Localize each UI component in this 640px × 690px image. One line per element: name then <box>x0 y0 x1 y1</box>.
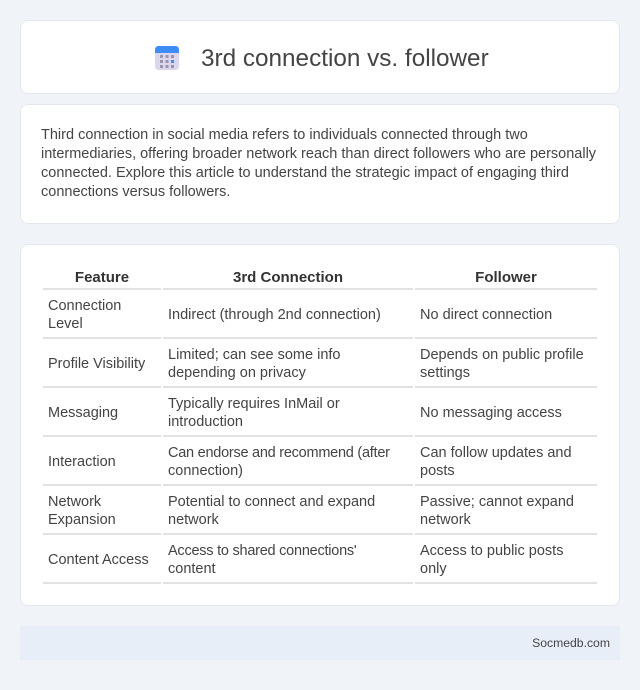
row: content access: Access to public posts <box>420 543 563 559</box>
row: content access <box>48 543 563 577</box>
row: network expansion: network <box>168 512 219 528</box>
row: profile visibility: Profile Visibility <box>48 356 145 372</box>
row: interaction: connection) <box>168 463 243 479</box>
table header: 3rd Connection <box>233 269 343 286</box>
intro text <box>41 127 596 200</box>
row: messaging <box>48 396 562 430</box>
row: interaction <box>48 445 572 479</box>
row: network expansion: Network <box>48 494 101 510</box>
intro text: connected. Explore this article to understand the strategic impact of engaging third <box>41 165 569 181</box>
row: connection level <box>48 298 552 332</box>
row: profile visibility: Limited; can see some info <box>168 347 340 363</box>
table header: Follower <box>475 269 537 286</box>
row: interaction: Can follow updates and <box>420 445 572 461</box>
row: content access: content <box>168 561 216 577</box>
footer bar <box>20 626 620 660</box>
table header: Feature <box>75 269 129 286</box>
row: connection level: Connection <box>48 298 121 314</box>
row: content access: only <box>420 561 447 577</box>
row: network expansion <box>48 494 574 528</box>
icon: calendar <box>155 46 179 70</box>
row: profile visibility <box>48 347 584 381</box>
row: messaging: introduction <box>168 414 243 430</box>
row: profile visibility: depending on privacy <box>168 365 306 381</box>
row: content access: Access to shared connections' <box>168 543 356 559</box>
row: content access: Content Access <box>48 552 149 568</box>
footer brand: Socmedb.com <box>532 636 610 650</box>
intro card <box>20 104 620 224</box>
row: messaging: No messaging access <box>420 405 562 421</box>
row: messaging: Typically requires InMail or <box>168 396 340 412</box>
row: network expansion: network <box>420 512 471 528</box>
intro text: intermediaries, offering broader network reach than direct followers who are personally <box>41 146 596 162</box>
row: network expansion: Expansion <box>48 512 116 528</box>
table card <box>20 244 620 606</box>
table header <box>75 269 537 286</box>
row: interaction: posts <box>420 463 455 479</box>
row: interaction: Interaction <box>48 454 116 470</box>
intro text: Third connection in social media refers to individuals connected through two <box>41 127 528 143</box>
row: profile visibility: settings <box>420 365 470 381</box>
row: connection level: Indirect (through 2nd connection) <box>168 307 381 323</box>
row: network expansion: Passive; cannot expand <box>420 494 574 510</box>
row: interaction: Can endorse and recommend (after <box>168 445 390 461</box>
row: connection level: Level <box>48 316 83 332</box>
intro text: connections versus followers. <box>41 184 230 200</box>
row: connection level: No direct connection <box>420 307 552 323</box>
row: network expansion: Potential to connect and expand <box>168 494 375 510</box>
title card <box>20 20 620 94</box>
row: messaging: Messaging <box>48 405 118 421</box>
title: 3rd connection vs. follower <box>201 45 489 72</box>
row: profile visibility: Depends on public profile <box>420 347 584 363</box>
